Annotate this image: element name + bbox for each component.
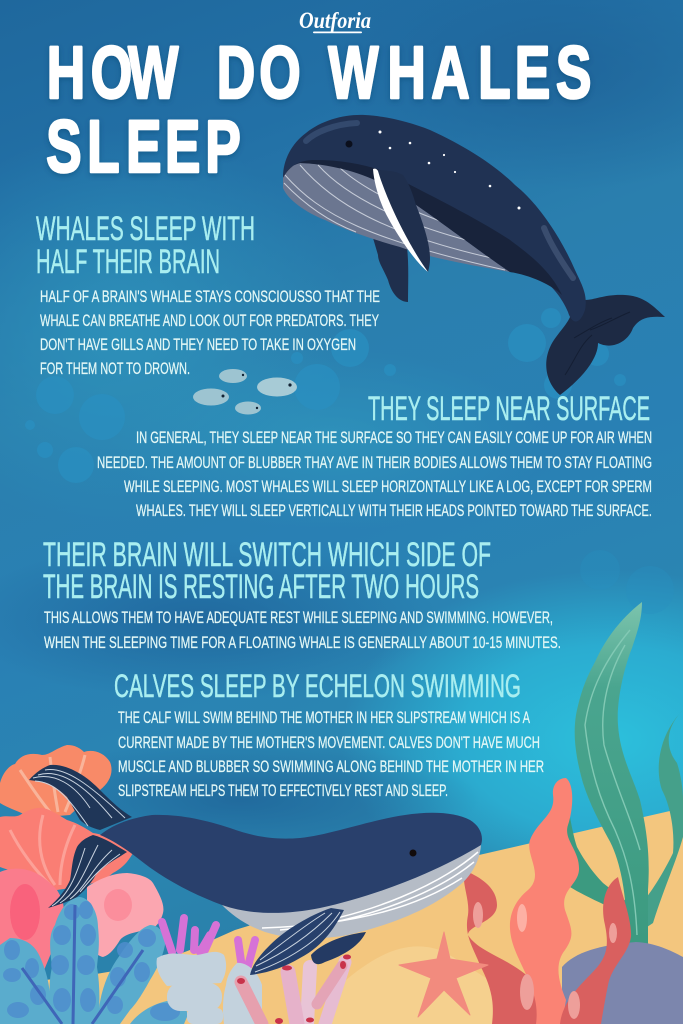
pink tube coral — [241, 962, 345, 1024]
orange coral — [0, 745, 112, 818]
eye — [410, 850, 416, 856]
bubbles — [25, 308, 674, 614]
text block: calves: SLIPSTREAM HELPS THEM TO EFFECTIVELY REST AND SLEEP. — [118, 782, 448, 800]
pink coral — [0, 869, 64, 973]
front flipper — [377, 170, 430, 272]
seaweed: red and salmon kelp — [464, 778, 631, 1024]
heading: whales sleep with half their brain: WHALES SLEEP WITH — [36, 210, 255, 248]
title: SLEEP — [46, 105, 241, 188]
seaweed: green — [560, 602, 683, 945]
grey sponge coral — [157, 952, 262, 1024]
right blade — [635, 710, 683, 935]
white spots — [378, 130, 520, 210]
text block: calves — [118, 709, 544, 800]
corals: left reef — [0, 745, 351, 1024]
belly pleats — [283, 163, 510, 272]
sand floor — [0, 808, 683, 1024]
left blade — [560, 817, 627, 925]
title — [46, 31, 591, 188]
text block: half their brain: DON'T HAVE GILLS AND THEY NEED TO TAKE IN OXYGEN — [40, 336, 356, 354]
logo: Outforia: Outforia — [299, 8, 371, 33]
icon: starfish — [399, 932, 488, 1017]
fish school — [193, 369, 297, 414]
text block: brain switches side — [44, 609, 561, 652]
body — [283, 115, 586, 322]
icon: adult whale — [283, 115, 665, 395]
rock — [562, 942, 683, 1024]
upper tail fluke — [29, 765, 132, 830]
rear flipper — [373, 238, 408, 302]
heading: brain switches side — [43, 536, 491, 606]
body — [100, 813, 482, 913]
belly band — [222, 845, 481, 938]
icon: calf whale — [29, 765, 482, 975]
title: HOWDOWHALES — [47, 31, 591, 114]
text block: half their brain: WHALE CAN BREATHE AND LOOK OUT FOR PREDATORS. THEY — [40, 312, 379, 330]
text block: half their brain: HALF OF A BRAIN'S WHALE STAYS CONSCIOUSSO THAT THE — [40, 288, 380, 306]
main blade — [575, 602, 649, 945]
heading: whales sleep with half their brain — [36, 210, 255, 281]
highlights — [306, 123, 357, 141]
pale pink coral — [87, 873, 163, 957]
tail fin — [546, 295, 665, 395]
text block: half their brain: FOR THEM NOT TO DROWN. — [40, 360, 190, 378]
anemone tentacles — [162, 918, 255, 968]
flippers — [311, 932, 366, 964]
lower tail fluke — [48, 835, 127, 908]
text block: near surface — [97, 429, 652, 520]
dark jaw band — [283, 160, 562, 295]
heading: whales sleep with half their brain: HALF THEIR BRAIN — [36, 243, 220, 281]
blue coral — [0, 897, 187, 1024]
red-pink coral — [0, 808, 133, 890]
text block: half their brain — [40, 288, 380, 378]
eye — [346, 140, 352, 148]
